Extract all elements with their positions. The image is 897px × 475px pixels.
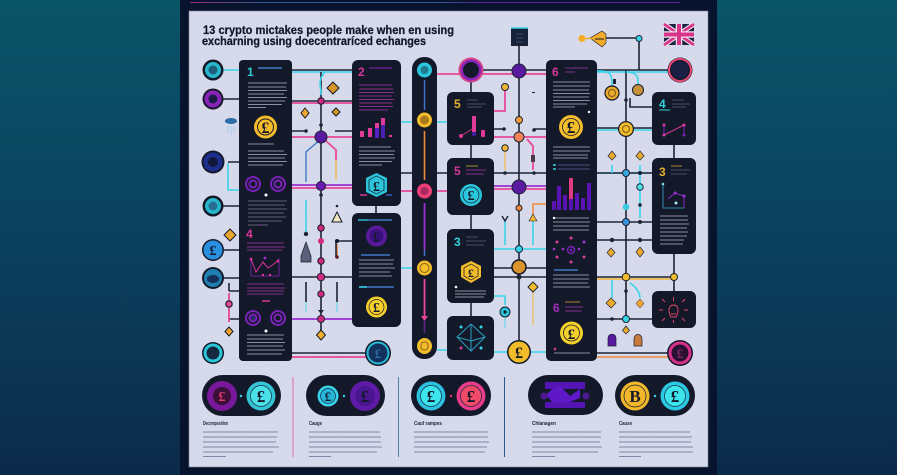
number 6: 6	[553, 301, 560, 315]
panel: 3 right	[652, 158, 696, 254]
node: blue pound	[202, 239, 224, 261]
column: decomposition: Decomposition	[203, 421, 228, 427]
bottom pill: purple and cyan	[202, 375, 281, 416]
bottom pill: cyan and pink: £	[427, 387, 435, 406]
column: cause: Cause	[619, 421, 632, 427]
column: chlanagen	[532, 421, 602, 456]
legend	[553, 165, 556, 169]
icon: gold diamond	[225, 327, 233, 336]
target icon	[500, 307, 510, 317]
bottom pill: cyan and pink: £	[467, 387, 475, 406]
text block	[553, 147, 590, 158]
middle nodes	[500, 64, 538, 364]
shield coin: cyan	[366, 173, 387, 197]
column: chlanagen: Chlanagen	[532, 421, 556, 427]
coin	[512, 260, 526, 274]
panel: bulb	[652, 291, 696, 328]
hub: pink coin: £	[677, 346, 684, 361]
line chart	[250, 257, 279, 276]
text block	[248, 144, 287, 165]
icon: crystal	[457, 324, 485, 351]
bottom pill: cyan and purple	[306, 375, 385, 416]
number 3: 3	[659, 165, 666, 179]
big navy node: £	[375, 346, 382, 361]
arrow icon	[502, 216, 508, 221]
gold diamond	[528, 282, 538, 292]
panel: 5 lower	[447, 158, 494, 215]
panel: 4	[652, 92, 696, 145]
network icon	[553, 236, 586, 264]
coin	[417, 260, 432, 276]
panel: 5 upper	[447, 92, 494, 145]
node: navy	[202, 150, 224, 174]
text block	[660, 216, 689, 244]
title: 13 crypto mictakes people make when en using	[203, 23, 454, 37]
diamond icon	[327, 82, 339, 94]
icon: diamond	[224, 229, 236, 241]
bar chart	[552, 178, 591, 210]
text block	[248, 201, 287, 225]
number 3: 3	[454, 235, 461, 249]
bottom pill: cyan and purple: £	[361, 387, 369, 406]
connector network	[223, 38, 674, 357]
bar chart	[360, 118, 392, 138]
node: pink	[226, 301, 232, 307]
chart	[459, 116, 485, 138]
right nodes	[605, 79, 693, 366]
panel: 3 shield	[447, 229, 494, 303]
coin: purple: £	[373, 229, 380, 244]
number 5: 5	[454, 97, 461, 111]
text block	[359, 85, 394, 110]
text block	[553, 218, 590, 230]
big navy node	[365, 340, 391, 366]
gold diamond	[316, 330, 326, 340]
icon: purple arch	[608, 334, 616, 346]
coin: gold	[559, 115, 583, 139]
coin	[417, 338, 432, 354]
number 1: 1	[247, 65, 254, 79]
big coin: £	[515, 345, 523, 362]
line chart	[662, 124, 686, 136]
chart	[662, 183, 686, 208]
panel: 2 lower	[352, 213, 401, 327]
text block	[455, 291, 486, 297]
bottom pill: bitcoin and cyan: B	[629, 387, 641, 406]
hub: purple ring	[458, 58, 484, 82]
number 6: 6	[552, 65, 559, 79]
number 5: 5	[454, 164, 461, 178]
top accent line	[190, 2, 680, 3]
panel: 2	[352, 60, 401, 206]
bottom pill: cyan and pink	[411, 375, 491, 416]
node: teal	[202, 267, 224, 289]
text block	[359, 147, 395, 165]
number 2: 2	[358, 65, 365, 79]
warning icon	[332, 212, 342, 222]
node: blue pound: £	[210, 244, 216, 259]
dividers	[292, 377, 294, 457]
coin: cyan: £	[468, 189, 474, 204]
left column nodes	[202, 60, 237, 364]
node: purple	[202, 88, 224, 110]
text block	[553, 82, 590, 107]
text block	[554, 269, 578, 271]
coin: gold	[254, 116, 277, 138]
bottom pill: bitcoin and cyan	[615, 375, 695, 416]
icon: orange arch	[634, 334, 642, 346]
coin: gold: £	[568, 327, 576, 343]
panel: diamond	[447, 316, 494, 360]
purple coins	[246, 177, 285, 191]
coin	[417, 62, 432, 78]
big coin	[507, 340, 531, 364]
node: cyan ring	[202, 196, 224, 216]
text block	[248, 83, 287, 108]
dark frame	[180, 0, 717, 475]
coin	[417, 184, 432, 198]
main sheet	[189, 11, 708, 467]
bottom pill: cyan and purple: £	[325, 389, 332, 404]
column: cauge	[309, 421, 382, 456]
hub: pink coin	[667, 340, 693, 366]
shield coin: gold: £	[468, 266, 474, 280]
bottom pill: bitcoin and cyan: £	[671, 387, 679, 406]
column: cauf rampes	[414, 421, 489, 452]
coin: gold: £	[567, 118, 575, 137]
panel: 1	[239, 60, 292, 361]
icon: cloud	[225, 118, 237, 135]
hooded icon	[301, 242, 311, 262]
pill column	[412, 57, 437, 359]
number 4: 4	[659, 97, 666, 111]
flag	[664, 24, 694, 45]
number 4: 4	[246, 227, 253, 241]
icon: lamp	[578, 31, 606, 47]
column: cauf rampes: Cauf rampes	[414, 421, 442, 427]
text block	[247, 335, 285, 354]
shield coin: cyan: £	[373, 180, 380, 195]
diamond icon	[301, 108, 309, 118]
top box icon	[511, 28, 528, 46]
coin: gold: £	[262, 120, 270, 137]
bottom pill: purple and cyan: £	[218, 390, 226, 405]
column: decomposition	[203, 421, 279, 456]
icon: bulb	[659, 297, 688, 323]
node: cyan bottom	[202, 342, 224, 364]
node: cyan	[202, 60, 224, 80]
bottom pill: purple exchange	[528, 375, 603, 415]
column: cauge: Cauge	[309, 421, 322, 427]
hub: pink ring	[668, 58, 692, 82]
warning icon	[529, 214, 537, 221]
coin: gold	[560, 322, 583, 344]
node	[636, 36, 642, 42]
gold diamonds	[608, 151, 616, 160]
coin	[417, 112, 432, 128]
central nodes	[301, 82, 391, 366]
column: cause	[619, 421, 693, 456]
bottom pill: purple and cyan: £	[257, 387, 265, 406]
diamond icon	[332, 108, 340, 116]
title second line: excharning using doecentraríced echanges	[202, 34, 426, 48]
panel: 6	[546, 60, 597, 361]
coin: gold: £	[373, 301, 380, 316]
purple coins	[246, 311, 285, 325]
text block	[361, 254, 390, 256]
